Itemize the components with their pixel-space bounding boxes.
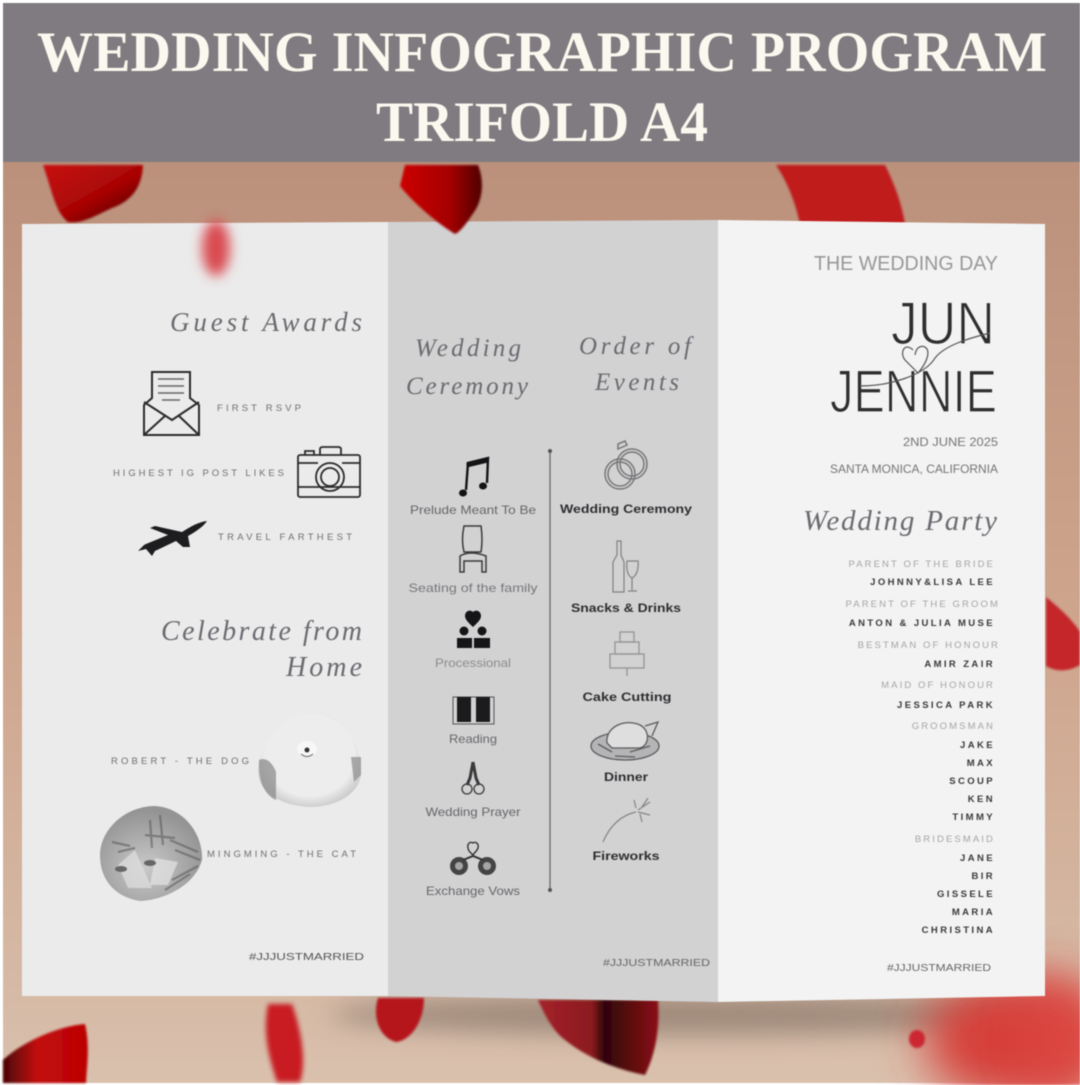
heading: celebrate from home — [161, 616, 362, 683]
label: highest ig post likes: HIGHEST IG POST LIKES — [113, 468, 284, 479]
icon: chair — [460, 526, 486, 572]
hashtag: #JJJUSTMARRIED — [249, 951, 365, 963]
panel: wedding ceremony and order of events — [388, 220, 718, 1002]
event: snacks and drinks — [571, 541, 681, 615]
icon: couple with heart — [457, 611, 490, 648]
title: TRIFOLD A4 — [376, 91, 708, 154]
party list: MARIA — [952, 907, 995, 918]
party list: BRIDESMAID — [915, 834, 995, 845]
event: dinner: Dinner — [604, 770, 648, 784]
party list: ANTON & JULIA MUSE — [849, 618, 995, 629]
event: cake cutting: Cake Cutting — [582, 690, 672, 704]
ceremony step: exchange vows — [426, 842, 520, 898]
couple names logo — [830, 290, 997, 425]
event: fireworks: Fireworks — [592, 849, 660, 863]
event: cake cutting — [582, 632, 672, 704]
party list: MAID OF HONOUR — [881, 680, 995, 691]
icon: praying hands — [462, 762, 484, 794]
title: WEDDING INFOGRAPHIC PROGRAM — [37, 21, 1047, 84]
timeline divider — [548, 449, 552, 892]
ceremony step: wedding prayer — [426, 762, 520, 819]
ceremony step: processional: Processional — [435, 656, 511, 670]
party list: GROOMSMAN — [912, 721, 995, 732]
header banner — [3, 3, 1080, 162]
icon: envelope — [144, 372, 199, 435]
panel: guest awards — [22, 220, 388, 996]
ceremony step: prelude — [410, 458, 536, 517]
icon: sparkler — [603, 798, 650, 842]
icon: hands with ring — [450, 842, 496, 875]
party list — [846, 559, 1000, 936]
couple names logo: JUN — [891, 290, 995, 357]
heading: wedding party: Wedding Party — [803, 505, 997, 537]
party list: JOHNNY&LISA LEE — [870, 577, 995, 588]
hashtag: #JJJUSTMARRIED — [603, 957, 710, 969]
party list: JAKE — [960, 740, 995, 751]
party list: MAX — [967, 758, 995, 769]
ceremony step: processional — [435, 611, 511, 670]
label: travel farthest: TRAVEL FARTHEST — [218, 532, 352, 543]
couple names logo: JENNIE — [830, 358, 997, 425]
heading: order of events: Events — [594, 369, 679, 396]
photo: cat — [100, 806, 202, 901]
label: robert the dog: ROBERT - THE DOG — [111, 756, 249, 767]
icon: cake — [610, 632, 644, 676]
party list: BESTMAN OF HONOUR — [858, 640, 1000, 651]
party list: PARENT OF THE BRIDE — [848, 559, 995, 570]
party list: JESSICA PARK — [897, 700, 995, 711]
text: location: SANTA MONICA, CALIFORNIA — [830, 462, 998, 476]
red petal overlapping the brochure — [400, 165, 482, 234]
icon: airplane — [138, 521, 207, 556]
icon: music notes — [460, 458, 488, 496]
heading: wedding ceremony — [406, 335, 529, 400]
ceremony step: exchange vows: Exchange Vows — [426, 884, 520, 898]
party list: AMIR ZAIR — [924, 659, 995, 670]
event: wedding ceremony: Wedding Ceremony — [560, 502, 692, 516]
photo: dog — [258, 712, 361, 807]
event: dinner — [591, 722, 659, 784]
blurred petal on panel — [202, 220, 230, 276]
party list: GISSELE — [937, 889, 995, 900]
label: first rsvp: FIRST RSVP — [217, 403, 301, 414]
hashtag: #JJJUSTMARRIED — [887, 962, 991, 974]
icon: bottle and glass — [613, 541, 638, 592]
ceremony step: seating: Seating of the family — [408, 581, 538, 595]
party list: JANE — [960, 853, 995, 864]
heading: order of events: Order of — [579, 333, 694, 360]
icon: roast turkey — [591, 722, 659, 760]
party list: KEN — [968, 794, 995, 805]
event: wedding ceremony — [560, 441, 692, 516]
heading: celebrate from home: Home — [285, 652, 362, 683]
ceremony step: seating — [408, 526, 538, 595]
party list: SCOUP — [949, 776, 995, 787]
heading: guest awards: Guest Awards — [170, 307, 362, 337]
event: snacks and drinks: Snacks & Drinks — [571, 601, 681, 615]
heading: celebrate from home: Celebrate from — [161, 616, 362, 647]
heading: wedding ceremony: Ceremony — [406, 373, 529, 400]
icon: book — [453, 697, 494, 724]
icon: camera — [298, 447, 360, 497]
panel: wedding day and party — [718, 220, 1045, 1002]
party list: BIR — [971, 871, 995, 882]
heading: order of events — [579, 333, 694, 396]
heading: wedding ceremony: Wedding — [415, 335, 521, 362]
ceremony step: reading — [449, 697, 497, 746]
title — [37, 21, 1047, 154]
text: the wedding day: THE WEDDING DAY — [814, 253, 998, 275]
ceremony step: prelude: Prelude Meant To Be — [410, 503, 536, 517]
party list: PARENT OF THE GROOM — [846, 599, 1000, 610]
event: fireworks — [592, 798, 660, 863]
icon: rings — [605, 441, 647, 489]
party list: CHRISTINA — [922, 925, 995, 936]
ceremony step: reading: Reading — [449, 732, 497, 746]
label: mingming the cat: MINGMING - THE CAT — [207, 849, 356, 860]
party list: TIMMY — [952, 812, 995, 823]
ceremony step: wedding prayer: Wedding Prayer — [426, 805, 520, 819]
text: date: 2ND JUNE 2025 — [903, 435, 998, 449]
